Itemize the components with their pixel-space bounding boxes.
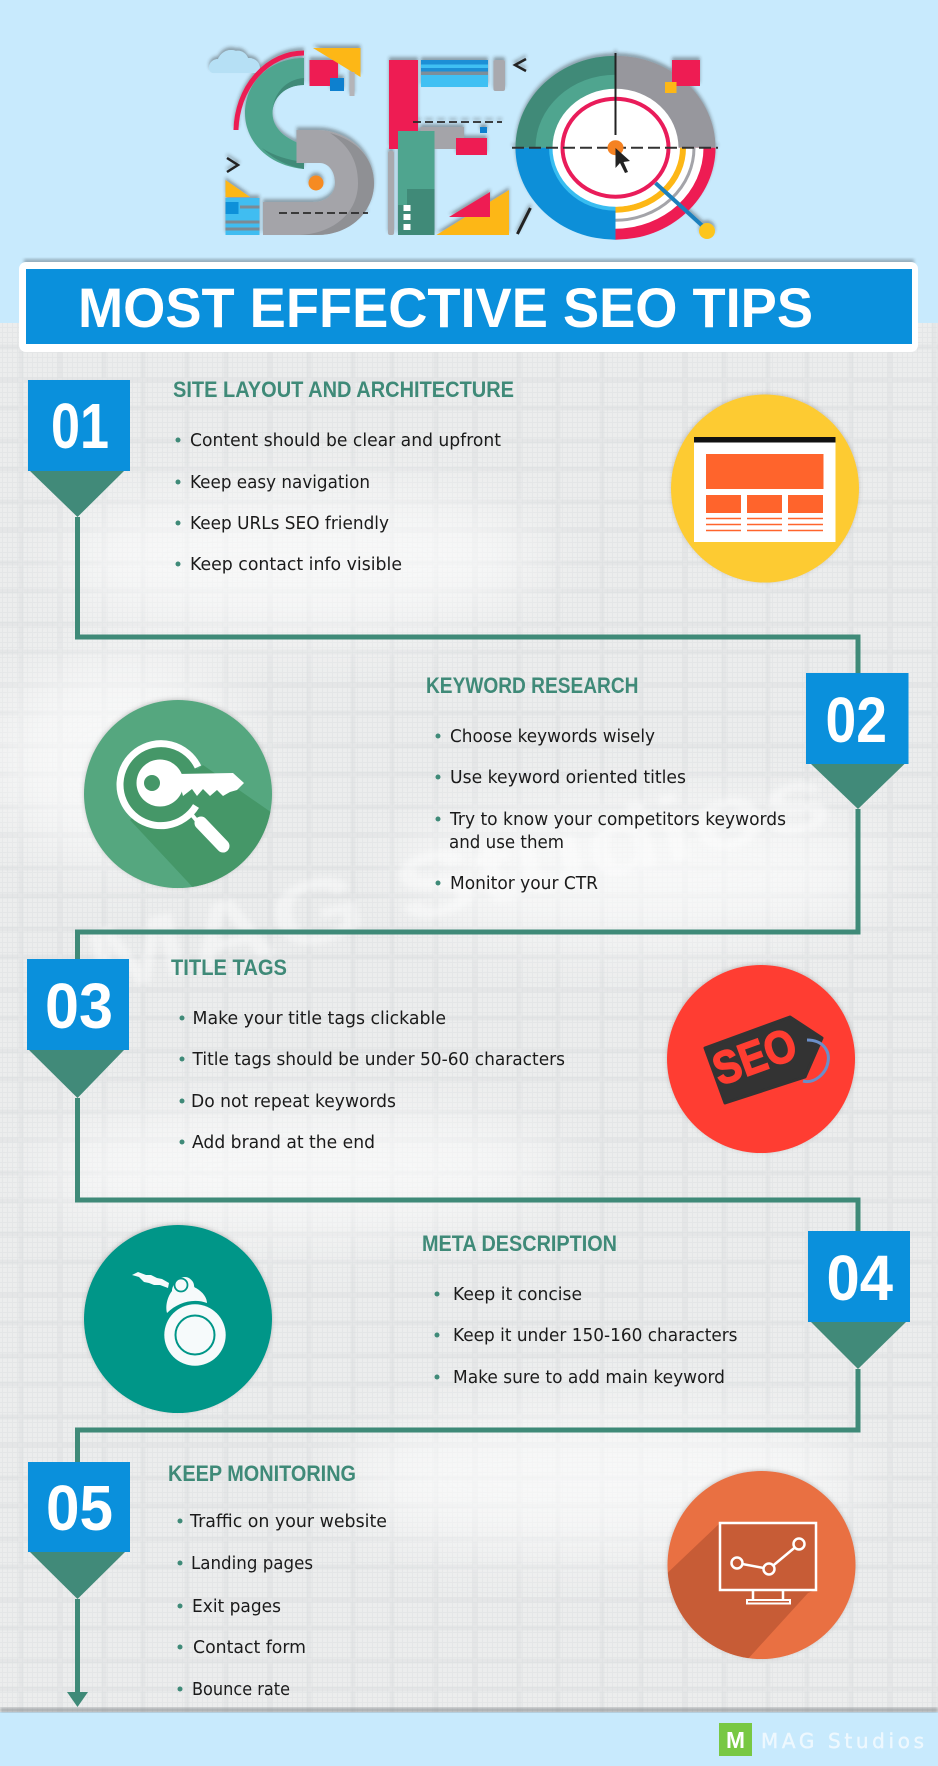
bullet list: Use keyword oriented titles: [450, 768, 686, 788]
icon: analytics monitor: [660, 1471, 856, 1660]
background: linen texture panel: [0, 323, 938, 1712]
badge 01: [28, 380, 130, 517]
bullet list: [434, 1285, 738, 1388]
bullet list: Exit pages: [192, 1597, 281, 1617]
bullet list: Title tags should be under 50-60 characters: [192, 1050, 565, 1070]
badge 03: 03: [45, 970, 113, 1042]
panel: site layout text: [173, 377, 514, 575]
bullet list: Do not repeat keywords: [191, 1092, 396, 1112]
bullet list: Traffic on your website: [189, 1512, 387, 1532]
icon: meta tag key: [84, 1225, 272, 1413]
bullet list: Keep URLs SEO friendly: [190, 514, 389, 534]
heading: META DESCRIPTION: [422, 1231, 617, 1256]
bullet list: Make your title tags clickable: [192, 1009, 446, 1029]
badge 03: [27, 959, 129, 1098]
footer logo: M: [726, 1727, 745, 1753]
heading: TITLE TAGS: [171, 955, 287, 980]
bullet list: Make sure to add main keyword: [453, 1368, 725, 1388]
bullet list: [180, 1009, 565, 1153]
icon: SEO tag: SEO: [706, 1017, 803, 1095]
heading: KEYWORD RESEARCH: [426, 673, 638, 698]
badge 05: 05: [46, 1472, 113, 1544]
panel: keyword research text: [426, 673, 786, 894]
heading: KEEP MONITORING: [168, 1461, 356, 1486]
bullet list: Monitor your CTR: [450, 874, 598, 894]
bullet list: Add brand at the end: [192, 1133, 375, 1153]
bullet list: [436, 727, 786, 894]
bullet list: Keep easy navigation: [190, 473, 370, 493]
bullet list: Bounce rate: [192, 1680, 290, 1700]
title banner: [19, 259, 918, 352]
panel: meta description text: [422, 1231, 738, 1388]
bullet list: Keep contact info visible: [190, 555, 402, 575]
panel: keep monitoring text: [168, 1461, 387, 1700]
icon: SEO tag: [667, 965, 855, 1153]
bullet list: Keep it concise: [453, 1285, 582, 1305]
bullet list: Try to know your competitors keywords: [449, 810, 786, 830]
bullet list: and use them: [449, 833, 564, 853]
badge 01: 01: [51, 390, 109, 462]
connector line with arrow: [67, 517, 858, 1707]
bullet list: Keep it under 150-160 characters: [453, 1326, 738, 1346]
badge 04: [808, 1231, 910, 1369]
badge 02: 02: [826, 684, 887, 756]
letter E: [388, 59, 530, 235]
footer logo: [719, 1723, 924, 1756]
bullet list: [178, 1512, 387, 1700]
badge 05: [28, 1462, 130, 1599]
SEO logo: [209, 48, 718, 240]
bullet list: Content should be clear and upfront: [190, 431, 501, 451]
badge 02: [806, 673, 908, 809]
bullet list: Contact form: [193, 1638, 306, 1658]
icon: website layout: [671, 394, 859, 582]
heading: SITE LAYOUT AND ARCHITECTURE: [173, 377, 514, 402]
bullet list: [176, 431, 501, 575]
bullet list: Landing pages: [191, 1554, 313, 1574]
letter S: [209, 48, 374, 235]
letter Q: [512, 53, 718, 240]
bullet list: Choose keywords wisely: [450, 727, 655, 747]
panel: title tags text: [171, 955, 565, 1153]
title: MOST EFFECTIVE SEO TIPS: [78, 276, 813, 339]
badge 04: 04: [826, 1242, 893, 1314]
icon: key and magnifier: [84, 700, 280, 900]
footer logo: MAG Studios: [761, 1729, 924, 1753]
watermark: MAG Studios: [77, 744, 840, 1014]
